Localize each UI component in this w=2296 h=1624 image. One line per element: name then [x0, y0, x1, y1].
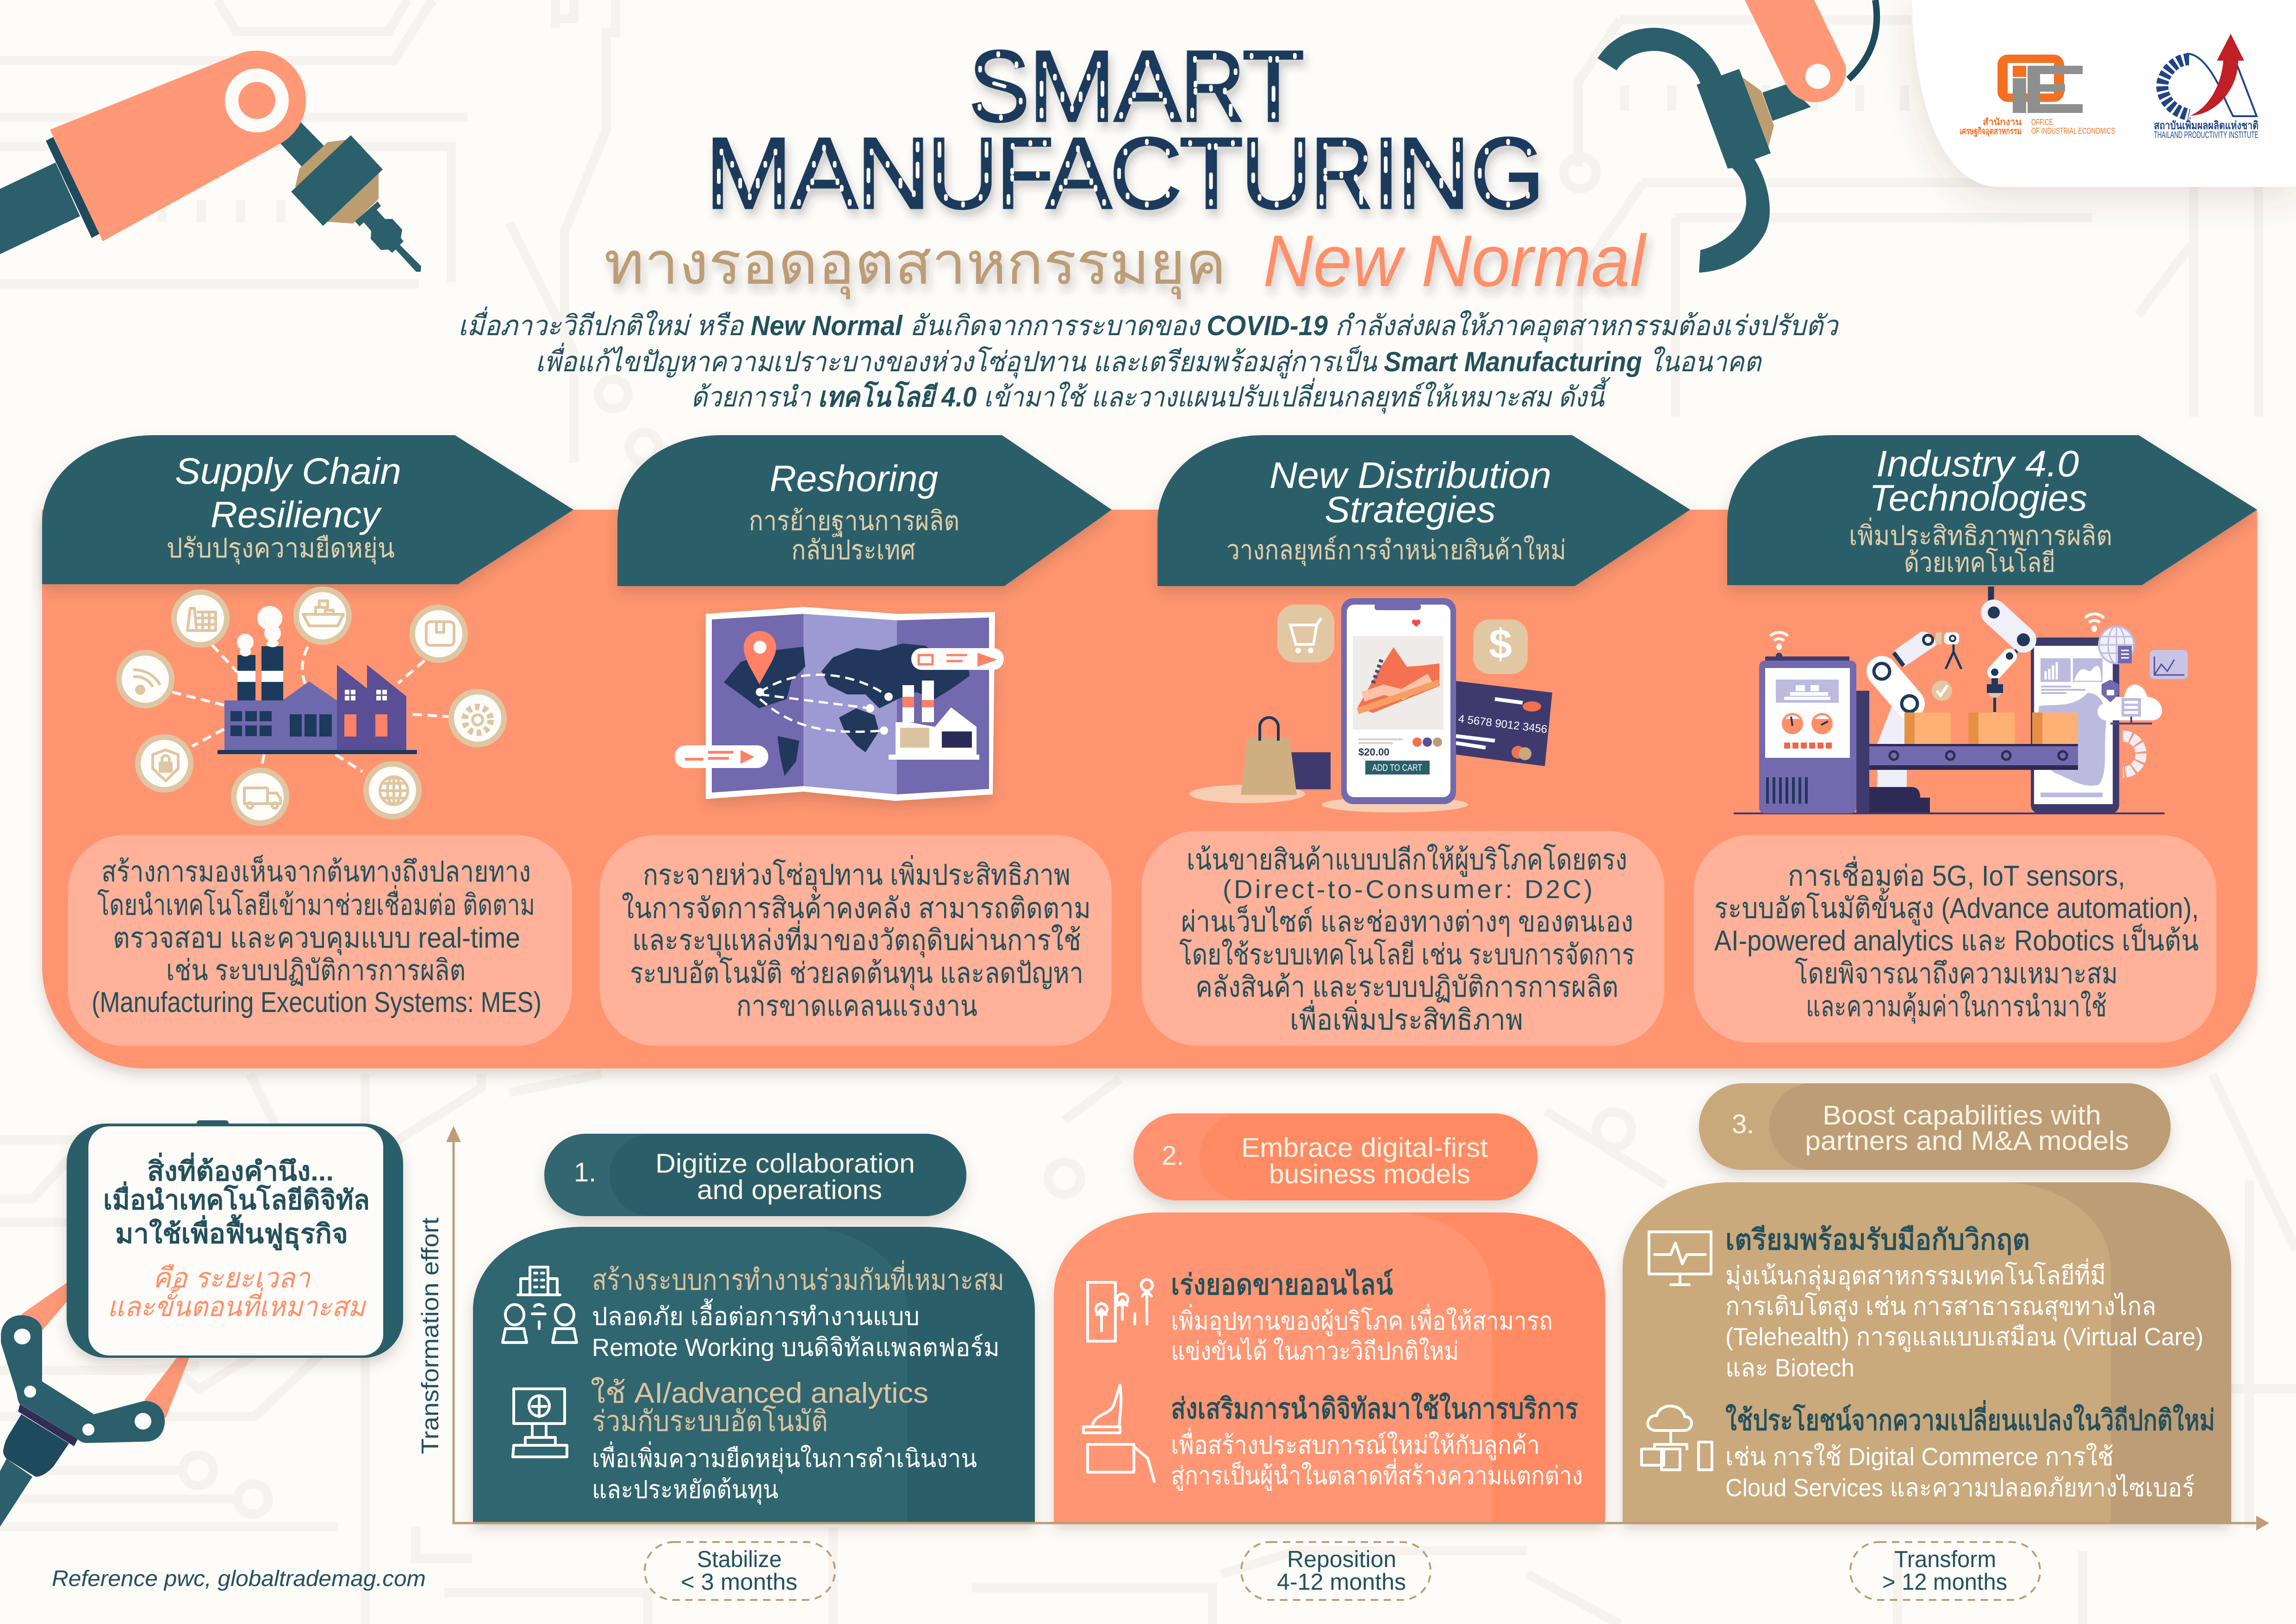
title: C: [1109, 116, 1182, 230]
text box 3: เน้นขายสินค้าแบบปลีกให้ผู้บริโภคโดยตรง: [1187, 843, 1627, 877]
heading: Supply Chain: [175, 450, 401, 492]
title: A: [1045, 116, 1112, 230]
title: N: [856, 116, 931, 230]
title: I: [1372, 116, 1400, 230]
text box 3: เพื่อเพิ่มประสิทธิภาพ: [1290, 1000, 1523, 1036]
title: U: [1240, 116, 1312, 230]
logo: Thailand Productivity Institute: [2154, 34, 2259, 140]
subtitle: New Normal: [1263, 220, 1647, 302]
reference source: Reference pwc, globaltrademag.com: [52, 1567, 426, 1591]
robot arm 1: [1869, 631, 1961, 812]
map pin: [744, 631, 776, 684]
stage 3 card: [1623, 1182, 2231, 1522]
text box 2: การขาดแคลนแรงงาน: [736, 990, 977, 1022]
text box 1: โดยนำเทคโนโลยีเข้ามาช่วยเชื่อมต่อ ติดตาม: [97, 885, 535, 921]
callout card: [67, 1120, 403, 1358]
stage 2 pill: business models: [1269, 1159, 1470, 1189]
heading: Resiliency: [211, 494, 382, 535]
text box 4: AI-powered analytics และ Robotics เป็นต้น: [1714, 924, 2199, 957]
shopping bag: [1291, 752, 1331, 789]
title: U: [927, 116, 999, 230]
stage 1 card: Remote Working บนดิจิทัลแพลตฟอร์ม: [592, 1334, 1000, 1362]
stage 3 pill: Boost capabilities with: [1823, 1100, 2101, 1131]
heading: กลับประเทศ: [791, 535, 915, 565]
title: T: [1179, 116, 1244, 230]
phone: [1341, 598, 1456, 804]
stage 3 pill: partners and M&A models: [1805, 1126, 2129, 1156]
title: A: [790, 116, 858, 230]
callout card: มาใช้เพื่อฟื้นฟูธุรกิจ: [115, 1214, 348, 1251]
stage 2 card: เพื่อสร้างประสบการณ์ใหม่ให้กับลูกค้า: [1171, 1428, 1540, 1460]
continents: [724, 643, 970, 776]
icon: cloud network: [1642, 1406, 1712, 1470]
title: S: [969, 29, 1030, 143]
text box 3: ผ่านเว็บไซต์ และช่องทางต่างๆ ของตนเอง: [1181, 905, 1633, 938]
stage 3 pill: 3.: [1732, 1109, 1754, 1139]
title: M: [1028, 29, 1116, 143]
text box 4: และความคุ้มค่าในการนำมาใช้: [1806, 990, 2107, 1024]
logo: Office of Industrial Economics: สำนักงาน: [1983, 117, 2022, 127]
panel: Reshoring: [600, 435, 1112, 1046]
callout card: สิ่งที่ต้องคำนึง...: [147, 1152, 334, 1187]
stage 1 pill: 1.: [574, 1157, 596, 1187]
dollar tile: [1473, 619, 1528, 674]
stage 1 card: เพื่อเพิ่มความยืดหยุ่นในการดำเนินงาน: [592, 1441, 977, 1474]
timeline label: reposition: Reposition: [1287, 1546, 1396, 1572]
timeline label: stabilize: Stabilize: [697, 1546, 782, 1572]
heading: การย้ายฐานการผลิต: [749, 506, 959, 537]
stage 2 card: [1054, 1212, 1605, 1522]
timeline label: stabilize: [645, 1542, 835, 1600]
text box 4: ระบบอัตโนมัติขั้นสูง (Advance automation),: [1714, 887, 2199, 925]
title: F: [996, 116, 1054, 230]
heading: New Distribution: [1269, 455, 1551, 496]
text box 3: (Direct-to-Consumer: D2C): [1223, 874, 1593, 904]
phone: ADD TO CART: [1372, 763, 1422, 773]
robot arm: top right: [1598, 0, 1877, 273]
stage 1 pill: [544, 1134, 966, 1216]
title: M: [705, 116, 793, 230]
text box 1: เช่น ระบบปฏิบัติการการผลิต: [166, 955, 466, 987]
stage 2 pill: Embrace digital-first: [1241, 1133, 1488, 1163]
title: T: [1242, 29, 1305, 143]
stage 1 card: ปลอดภัย เอื้อต่อการทำงานแบบ: [592, 1299, 920, 1330]
timeline label: stabilize: < 3 months: [681, 1569, 797, 1595]
intro text: เมื่อภาวะวิถีปกติใหม่ หรือ New Normal อันเกิดจากการระบาดของ COVID-19 กำลังส่งผลให้ภาคอุตสาหกรรมต้องเร่งปรับตัว: [458, 306, 1839, 343]
text box 3: โดยใช้ระบบเทคโนโลยี เช่น ระบบการจัดการ: [1179, 938, 1635, 971]
text box 2: [600, 835, 1112, 1046]
title: A: [1114, 29, 1182, 143]
heading: ด้วยเทคโนโลยี: [1904, 547, 2055, 578]
stage 1 card: และประหยัดต้นทุน: [592, 1476, 778, 1505]
route tags: [675, 745, 768, 768]
stage 3 card: มุ่งเน้นกลุ่มอุตสาหกรรมเทคโนโลยีที่มี: [1725, 1258, 2106, 1291]
stage 1 card: สร้างระบบการทำงานร่วมกันที่เหมาะสม: [592, 1260, 1004, 1296]
header arrow 3: [1157, 435, 1690, 586]
text box 3: คลังสินค้า และระบบปฏิบัติการการผลิต: [1195, 971, 1618, 1003]
robot arm: top left: [0, 50, 421, 272]
timeline label: transform: Transform: [1894, 1546, 1996, 1572]
text box 1: [68, 835, 572, 1046]
timeline label: reposition: 4-12 months: [1277, 1569, 1406, 1595]
heading: เพิ่มประสิทธิภาพการผลิต: [1849, 517, 2112, 551]
stage 3 card: การเติบโตสูง เช่น การสาธารณสุขทางไกล: [1725, 1292, 2156, 1322]
heading: [1226, 455, 1566, 567]
timeline label: transform: > 12 months: [1882, 1569, 2007, 1595]
text box 2: กระจายห่วงโซ่อุปทาน เพิ่มประสิทธิภาพ: [643, 855, 1070, 892]
panel: New Distribution Strategies: [1142, 435, 1690, 1046]
robot arm: bottom left: [0, 1283, 189, 1527]
text box 1: ตรวจสอบ และควบคุมแบบ real-time: [113, 922, 520, 955]
stage 2 card: แข่งขันได้ ในภาวะวิถีปกติใหม่: [1171, 1337, 1459, 1365]
heading: Technologies: [1869, 477, 2087, 518]
heading: [167, 450, 401, 565]
phone with dashboard: [2031, 637, 2119, 813]
header arrow 4: [1727, 435, 2257, 585]
orange strategies panel: [42, 510, 2257, 1068]
factory illustration: [119, 589, 504, 823]
text box 2: ระบบอัตโนมัติ ช่วยลดต้นทุน และลดปัญหา: [630, 957, 1083, 990]
map illustration: [675, 607, 1004, 801]
heading: Strategies: [1325, 489, 1496, 530]
stage 3 card: (Telehealth) การดูแลแบบเสมือน (Virtual Care): [1725, 1323, 2203, 1352]
title: N: [1397, 116, 1471, 230]
header arrow 2: [617, 435, 1112, 586]
cloud with shield: [2097, 680, 2162, 724]
stage 3 pill: [1699, 1083, 2171, 1170]
credit card: 4 5678 9012 3456: [1457, 712, 1548, 736]
timeline label: transform: [1850, 1542, 2040, 1600]
header arrow 1: [42, 435, 573, 584]
globe: [2099, 626, 2134, 663]
stage 1 card: ใช้ AI/advanced analytics: [591, 1377, 928, 1409]
heading: ปรับปรุงความยืดหยุ่น: [167, 533, 395, 565]
wifi icons: [1770, 632, 1788, 641]
callout card: และขั้นตอนที่เหมาะสม: [107, 1287, 367, 1322]
text box 1: สร้างการมองเห็นจากต้นทางถึงปลายทาง: [101, 855, 531, 888]
cart tile: [1277, 605, 1334, 662]
sneaker: [1358, 647, 1439, 713]
heading: [1849, 443, 2112, 578]
text box 3: [1142, 831, 1664, 1046]
title: [705, 29, 1545, 230]
stage 3 card: เช่น การใช้ Digital Commerce การใช้: [1725, 1443, 2114, 1471]
robot arm 2: [1987, 587, 2030, 712]
conveyor with boxes: [1869, 712, 2078, 770]
stage 2 pill: [1133, 1113, 1537, 1200]
title: R: [1310, 116, 1374, 230]
stage 2 card: เพิ่มอุปทานของผู้บริโภค เพื่อให้สามารถ: [1171, 1304, 1553, 1337]
text box 2: ในการจัดการสินค้าคงคลัง สามารถติดตาม: [622, 892, 1091, 924]
stage 2 card: สู่การเป็นผู้นำในตลาดที่สร้างความแตกต่าง: [1171, 1458, 1583, 1491]
logo panel: [1912, 0, 2296, 187]
icon: health monitor: [1649, 1232, 1711, 1285]
stage 2 pill: 2.: [1162, 1141, 1184, 1171]
icon: AI computer: [513, 1389, 567, 1457]
text box 1: (Manufacturing Execution Systems: MES): [92, 987, 541, 1018]
title: R: [1180, 29, 1245, 143]
y axis label: Transformation effort: [417, 1217, 444, 1454]
panel: Industry 4.0 Technologies: [1694, 435, 2257, 1043]
icon: online sales growth: [1088, 1280, 1152, 1341]
stage 2 card: เร่งยอดขายออนไลน์: [1171, 1268, 1393, 1301]
timeline label: reposition: [1241, 1542, 1431, 1600]
machine: [1759, 653, 1869, 813]
text box 2: และระบุแหล่งที่มาของวัตถุดิบผ่านการใช้: [632, 920, 1081, 957]
text box 4: โดยพิจารณาถึงความเหมาะสม: [1795, 957, 2118, 990]
callout card: คือ ระยะเวลา: [153, 1262, 311, 1293]
logo: Thailand Productivity Institute: สถาบันเพิ่มผลผลิตแห่งชาติ: [2154, 117, 2259, 132]
stage 3 card: และ Biotech: [1725, 1354, 1854, 1382]
e-commerce illustration: [1189, 598, 1552, 812]
phone: $20.00: [1358, 746, 1389, 758]
heading: Reshoring: [770, 458, 938, 499]
stage 1 card: ร่วมกับระบบอัตโนมัติ: [592, 1405, 828, 1437]
chart tile: [2150, 650, 2188, 679]
callout card: เมื่อนำเทคโนโลยีดิจิทัล: [103, 1181, 370, 1215]
gear: [2123, 736, 2141, 772]
icon: digital service: [1083, 1385, 1154, 1481]
heading: [749, 458, 959, 565]
smart factory illustration: [1734, 587, 2188, 814]
factory on map: [902, 681, 934, 722]
text box 4: [1694, 835, 2216, 1043]
intro text: เพื่อแก้ไขปัญหาความเปราะบางของห่วงโซ่อุปทาน และเตรียมพร้อมสู่การเป็น Smart Manufacturing ในอนาคต: [535, 343, 1762, 379]
logo: Office of Industrial Economics: OFFICE: [2031, 118, 2053, 127]
logo: Office of Industrial Economics: [1960, 55, 2115, 137]
icon circles: [119, 589, 504, 823]
credit card: [1456, 681, 1552, 766]
icon: remote workers: [503, 1305, 577, 1343]
stage 2 card: ส่งเสริมการนำดิจิทัลมาใช้ในการบริการ: [1171, 1393, 1578, 1425]
stage 3 card: Cloud Services และความปลอดภัยทางไซเบอร์: [1725, 1474, 2195, 1502]
dollar tile: $: [1489, 621, 1512, 668]
subtitle: [604, 220, 1647, 302]
stage 1 pill: and operations: [697, 1175, 882, 1205]
stage 1 card: [473, 1227, 1035, 1522]
title: G: [1470, 116, 1545, 230]
text box 4: การเชื่อมต่อ 5G, IoT sensors,: [1788, 856, 2125, 892]
logo: Office of Industrial Economics: OF INDUSTRIAL ECONOMICS: [2031, 126, 2115, 136]
intro text: [458, 306, 1839, 414]
heading: วางกลยุทธ์การจำหน่ายสินค้าใหม่: [1226, 535, 1566, 567]
heading: Industry 4.0: [1876, 443, 2079, 484]
panel: Supply Chain Resiliency: [42, 435, 573, 1046]
logo: Office of Industrial Economics: เศรษฐกิจอุตสาหกรรม: [1960, 126, 2022, 137]
subtitle: ทางรอดอุตสาหกรรมยุค: [604, 231, 1226, 300]
icon: building: [518, 1267, 560, 1295]
axes: [446, 1126, 2269, 1530]
stage 3 card: เตรียมพร้อมรับมือกับวิกฤต: [1725, 1224, 2030, 1256]
intro text: ด้วยการนำ เทคโนโลยี 4.0 เข้ามาใช้ และวางแผนปรับเปลี่ยนกลยุทธ์ให้เหมาะสม ดังนี้: [691, 377, 1611, 414]
stage 1 pill: Digitize collaboration: [655, 1149, 915, 1179]
